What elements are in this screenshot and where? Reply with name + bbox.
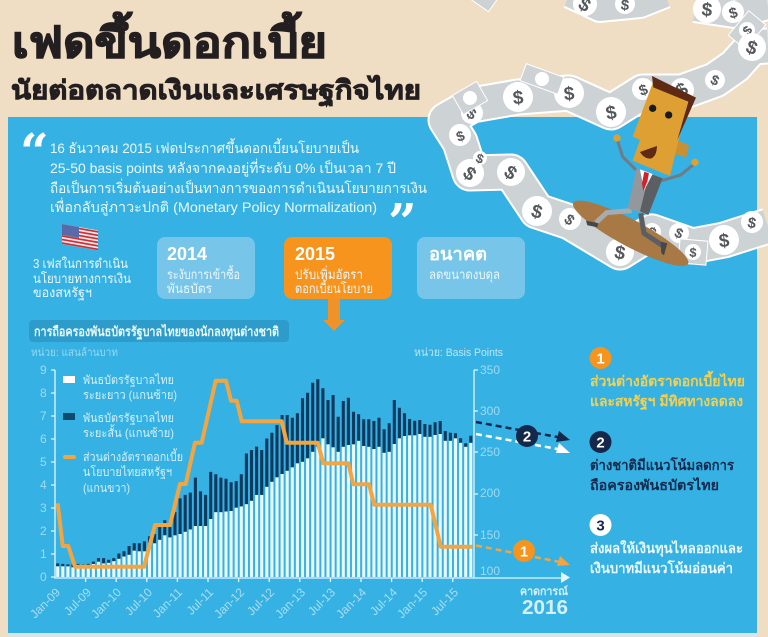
panel: phase 2015: ปรับเพิ่มอัตรา xyxy=(295,266,363,282)
badge 2 on chart xyxy=(516,425,538,447)
legend: ระยะยาว (แกนซ้าย) xyxy=(83,388,177,402)
illustration: trail of dollar bills: $ xyxy=(613,242,627,265)
time axis labels: Jul-09 xyxy=(61,585,94,618)
time axis labels: Jan-13 xyxy=(272,585,308,621)
text: US policy phases: นโยบายทางการเงิน xyxy=(33,271,131,286)
illustration: trail of dollar bills: $ xyxy=(708,71,722,89)
time axis labels: Jan-10 xyxy=(88,585,124,621)
right axis unit: หน่วย: Basis Points xyxy=(414,347,503,359)
left axis labels: 4 xyxy=(40,478,47,492)
time axis labels: Jul-15 xyxy=(428,585,461,618)
panel: phase future: อนาคต xyxy=(429,244,487,264)
right axis labels: 250 xyxy=(480,445,500,459)
illustration: trail of dollar bills: $ xyxy=(689,245,698,260)
panel: phase future xyxy=(417,237,525,299)
left axis labels xyxy=(40,363,47,584)
illustration: trail of dollar bills: $ xyxy=(718,231,731,252)
subtitle: นัยต่อตลาดเงินและเศรษฐกิจไทย xyxy=(11,74,421,108)
long-term bond bars xyxy=(58,434,471,577)
time axis labels: Jul-13 xyxy=(305,585,338,618)
illustration: trail of dollar bills: $ xyxy=(743,37,760,60)
quote marks opening: “ xyxy=(20,122,49,181)
illustration: trail of dollar bills: $ xyxy=(529,201,545,224)
axes xyxy=(51,370,562,582)
panel: phase 2014: 2014 xyxy=(167,244,207,264)
forecast arrow: rate spread xyxy=(476,546,570,566)
legend: ระยะสั้น (แกนซ้าย) xyxy=(83,424,174,440)
illustration: trail of dollar bills: $ xyxy=(672,78,692,102)
text: US policy phases: 3 เฟสในการดำเนิน xyxy=(33,256,128,271)
quote marks closing: ” xyxy=(388,192,417,251)
time axis labels: Jan-12 xyxy=(211,585,247,621)
illustration: trail of dollar bills: $ xyxy=(512,88,525,109)
illustration: trail of dollar bills: $ xyxy=(604,102,619,125)
legend: พันธบัตรรัฐบาลไทย xyxy=(83,373,174,387)
forecast arrow: long-term holdings xyxy=(476,434,570,453)
left axis labels: 6 xyxy=(40,432,47,446)
finding 3: เงินบาทมีแนวโน้มอ่อนค่า xyxy=(590,559,733,576)
panel: phase 2014 xyxy=(157,237,255,299)
left axis labels: 9 xyxy=(40,363,47,377)
badge 1 on chart: 1 xyxy=(520,544,528,560)
badge 2 on chart: 2 xyxy=(523,428,531,446)
finding 1: ส่วนต่างอัตราดอกเบี้ยไทย xyxy=(590,370,745,389)
illustration: trail of dollar bills: $ xyxy=(746,214,758,233)
legend: ส่วนต่างอัตราดอกเบี้ย xyxy=(83,448,183,464)
quote text: 25-50 basis points หลังจากคงอยู่ที่ระดับ 0% เป็นเวลา 7 ปี xyxy=(50,159,396,177)
legend xyxy=(63,373,183,495)
illustration: trail of dollar bills: $ xyxy=(701,0,713,21)
left axis labels: 1 xyxy=(40,547,47,561)
quote text xyxy=(50,138,427,216)
title: เฟดขึ้นดอกเบี้ย xyxy=(12,11,327,66)
text: US policy phases: ของสหรัฐฯ xyxy=(33,285,92,301)
short-term bond bars xyxy=(58,379,471,568)
forecast label 2016 xyxy=(520,585,569,619)
finding 1: 1 xyxy=(596,350,605,368)
finding 3: 3 xyxy=(596,518,605,534)
time axis labels: Jan-14 xyxy=(333,585,369,621)
illustration: trail of dollar bills: $ xyxy=(637,81,651,100)
right axis labels: 200 xyxy=(480,486,500,500)
legend: พันธบัตรรัฐบาลไทย xyxy=(83,411,174,425)
time axis labels: Jul-12 xyxy=(244,585,277,618)
quote text: 16 ธันวาคม 2015 เฟดประกาศขึ้นดอกเบี้ยนโยบายเป็น xyxy=(50,138,359,156)
left axis labels: 7 xyxy=(40,409,47,423)
illustration: trail of dollar bills: $ xyxy=(454,127,467,145)
illustration: trail of dollar bills xyxy=(446,0,768,268)
icon: US flag xyxy=(62,224,98,250)
finding 2: 2 xyxy=(596,434,605,452)
chart heading xyxy=(29,320,289,342)
illustration: trail of dollar bills: $ xyxy=(458,163,480,186)
time axis labels: Jan-11 xyxy=(150,585,185,620)
finding 2: ต่างชาติมีแนวโน้มลดการ xyxy=(590,456,734,473)
illustration: trail of dollar bills: $ xyxy=(727,4,740,23)
left axis labels: 2 xyxy=(40,524,47,538)
illustration: trail of dollar bills: $ xyxy=(672,224,686,242)
illustration: trail of dollar bills: $ xyxy=(563,84,576,105)
time axis labels: Jul-10 xyxy=(122,585,155,618)
badge 1 on chart xyxy=(513,540,535,562)
panel: phase 2015: ดอกเบี้ยนโยบาย xyxy=(295,279,373,296)
illustration: trail of dollar bills: $ xyxy=(474,150,487,167)
panel: phase 2014: ระงับการเข้าซื้อ xyxy=(167,265,240,282)
illustration: surfing businessman xyxy=(567,76,699,276)
finding 3 xyxy=(590,514,743,576)
left axis labels: 3 xyxy=(40,501,47,515)
illustration: trail of dollar bills: $ xyxy=(739,22,756,38)
left axis labels: 5 xyxy=(40,455,47,469)
text: US policy phases xyxy=(33,256,131,301)
right axis labels xyxy=(480,363,500,578)
illustration: trail of dollar bills: $ xyxy=(645,223,660,241)
time axis labels: Jan-15 xyxy=(394,585,430,621)
chart heading: การถือครองพันธบัตรรัฐบาลไทยของนักลงทุนต่างชาติ xyxy=(34,323,279,341)
right axis labels: 300 xyxy=(480,404,500,418)
illustration: trail of dollar bills: $ xyxy=(463,105,480,124)
finding 2: ถือครองพันธบัตรไทย xyxy=(590,476,719,493)
time axis labels: Jul-11 xyxy=(184,585,216,618)
quote text: เพื่อกลับสู่ภาวะปกติ (Monetary Policy Normalization) xyxy=(50,198,377,216)
legend: นโยบายไทยสหรัฐฯ xyxy=(83,465,172,479)
chart: bond holdings and rate spread xyxy=(27,363,570,621)
left axis unit: หน่วย: แสนล้านบาท xyxy=(31,347,118,359)
quote text: ถือเป็นการเริ่มต้นอย่างเป็นทางการของการดำเนินนโยบายการเงิน xyxy=(50,179,427,196)
forecast label 2016: 2016 xyxy=(522,597,568,619)
forecast label 2016: คาดการณ์ xyxy=(520,585,569,598)
left axis labels: 0 xyxy=(40,570,47,584)
time axis labels xyxy=(27,585,461,621)
illustration: trail of dollar bills: $ xyxy=(500,162,521,185)
finding 1 xyxy=(590,347,745,411)
right axis labels: 350 xyxy=(480,363,500,377)
time axis labels: Jan-09 xyxy=(27,585,63,621)
panel: main blue background xyxy=(8,117,757,633)
panel: phase 2015 xyxy=(284,237,392,299)
time axis labels: Jul-14 xyxy=(367,585,400,618)
panel: phase 2015: 2015 xyxy=(295,244,335,264)
arrow: from 2015 to chart xyxy=(323,299,345,331)
finding 2 xyxy=(590,431,734,493)
rate spread line xyxy=(58,381,472,567)
finding 1: และสหรัฐฯ มีทิศทางลดลง xyxy=(590,393,743,411)
right axis labels: 150 xyxy=(480,528,500,542)
panel: phase future: ลดขนาดงบดุล xyxy=(429,267,500,283)
left axis labels: 8 xyxy=(40,386,47,400)
panel: phase 2014: พันธบัตร xyxy=(167,281,212,296)
illustration: trail of dollar bills: $ xyxy=(560,211,578,230)
legend: (แกนขวา) xyxy=(83,481,130,495)
finding 3: ส่งผลให้เงินทุนไหลออกและ xyxy=(590,539,743,557)
forecast arrow: short-term holdings xyxy=(476,422,570,442)
right axis labels: 100 xyxy=(480,564,500,578)
